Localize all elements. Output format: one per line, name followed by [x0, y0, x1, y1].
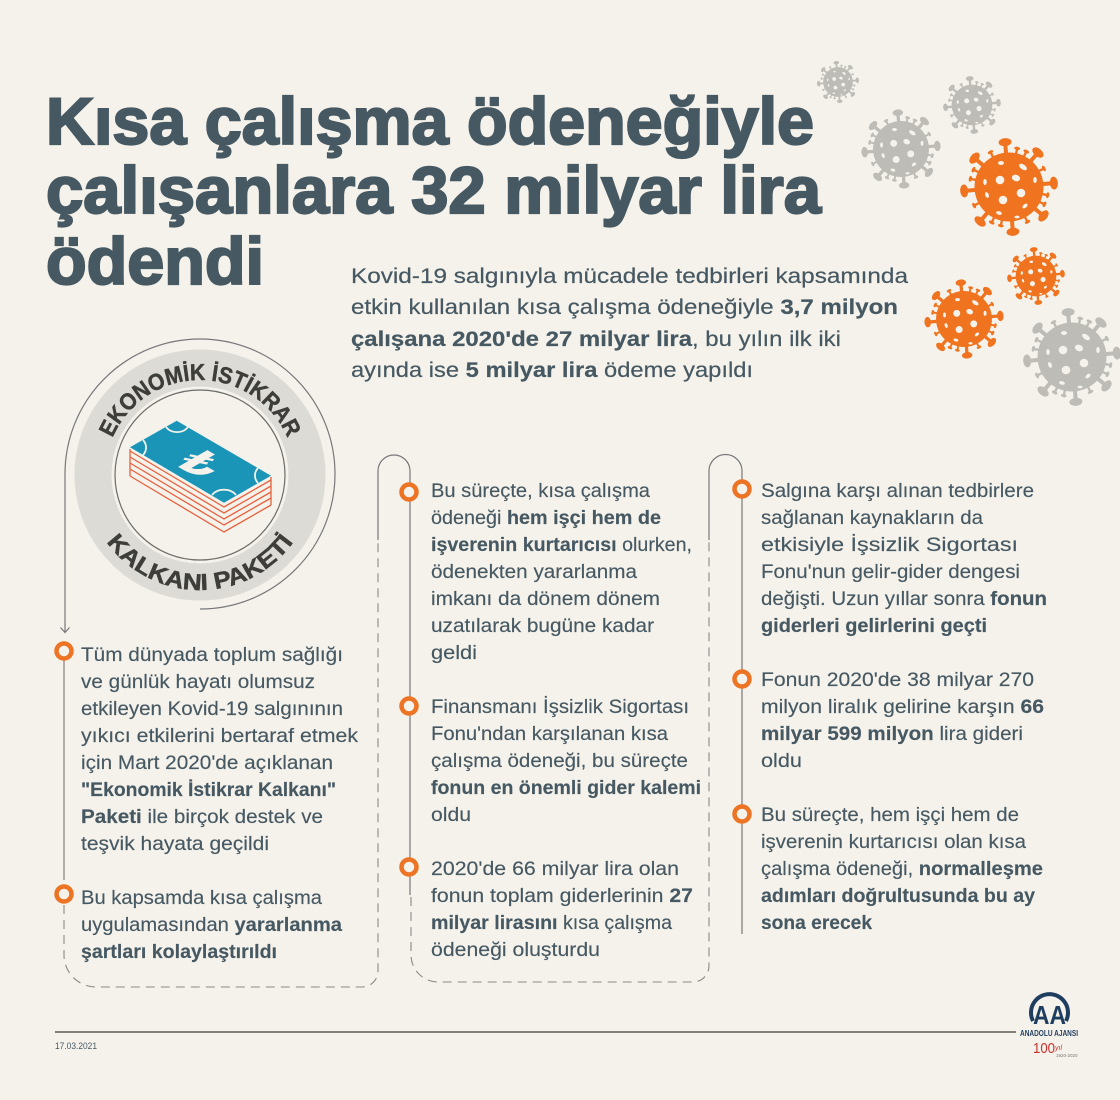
column 1 text: "Ekonomik İstikrar Kalkanı" — [81, 778, 336, 801]
column 1 text: yıkıcı etkilerini bertaraf etmek — [81, 725, 358, 747]
column 3 text: Fonu'nun gelir-gider dengesi — [761, 561, 1020, 583]
column 1 text: uygulamasından yararlanma — [81, 914, 342, 936]
column 2 text: fonun en önemli gider kalemi — [431, 777, 701, 799]
agency name: ANADOLU AJANSI — [1020, 1028, 1078, 1038]
icon: large orange virus — [960, 138, 1058, 236]
column 3 text: milyar 599 milyon lira gideri — [761, 723, 1023, 745]
column 2 text: ödeneği oluşturdu — [431, 939, 600, 961]
column 2 text: fonun toplam giderlerinin 27 — [431, 885, 693, 907]
column 1 text: Paketi ile birçok destek ve — [81, 806, 323, 828]
connector: column 1 solid line — [63, 651, 65, 880]
date: 17.03.2021 — [55, 1041, 97, 1051]
connector: dashed link from column 1 to column 2 — [64, 540, 378, 987]
badge: Ekonomik İstikrar Kalkanı Paketi — [74, 350, 326, 600]
column 3 text: sona erecek — [761, 912, 872, 934]
column 2 text: imkanı da dönem dönem — [431, 588, 660, 610]
badge inner circle — [115, 390, 285, 560]
column 2 text: Fonu'ndan karşılanan kısa — [431, 723, 668, 745]
years: 1920-2020 — [1056, 1053, 1078, 1058]
column 1 text: etkileyen Kovid-19 salgınının — [81, 698, 343, 720]
column 1 text — [81, 644, 358, 963]
icon: small grey virus — [817, 61, 859, 103]
column 2 text — [431, 480, 701, 961]
intro text block — [351, 265, 908, 382]
column 3 text: adımları doğrultusunda bu ay — [761, 885, 1035, 907]
column 1 text: Tüm dünyada toplum sağlığı — [81, 644, 343, 666]
icon: small orange virus — [1007, 247, 1065, 305]
ring text top: EKONOMİK İSTİKRAR — [98, 360, 300, 438]
intro text block: etkin kullanılan kısa çalışma ödeneğiyle 3,7 milyon — [351, 296, 898, 319]
ring text bottom: KALKANI PAKETİ — [107, 531, 293, 590]
column 3 text: etkisiyle İşsizlik Sigortası — [761, 533, 1018, 556]
column 3 text: değişti. Uzun yıllar sonra fonun — [761, 588, 1047, 610]
icon: orange virus — [924, 279, 1004, 359]
icon: lira banknote stack — [130, 421, 271, 532]
column 1 text: ve günlük hayatı olumsuz — [81, 671, 315, 693]
intro text block: ayında ise 5 milyar lira ödeme yapıldı — [351, 359, 753, 382]
title — [46, 84, 822, 298]
column 3 text: Bu süreçte, hem işçi hem de — [761, 804, 1019, 826]
title: Kısa çalışma ödeneğiyle — [46, 84, 814, 158]
column 3 text: Fonun 2020'de 38 milyar 270 — [761, 669, 1034, 691]
column 3 text — [761, 480, 1047, 934]
column 2 text: Bu süreçte, kısa çalışma — [431, 480, 650, 502]
icons: virus cluster — [817, 61, 1120, 406]
column 2 text: Finansmanı İşsizlik Sigortası — [431, 695, 689, 718]
logo arch — [1031, 994, 1068, 1021]
connector: dashed link from column 2 to column 3 — [411, 540, 709, 982]
column 2 text: ödeneği hem işçi hem de — [431, 507, 661, 529]
100th year mark: 100 — [1033, 1040, 1055, 1057]
column 1 text: Bu kapsamda kısa çalışma — [81, 887, 322, 909]
connector arrow around badge — [60, 339, 335, 632]
column 3 text: milyon liralık gelirine karşın 66 — [761, 696, 1044, 718]
column 2 text: oldu — [431, 804, 471, 826]
column 1 text: şartları kolaylaştırıldı — [81, 941, 277, 963]
intro text block: Kovid-19 salgınıyla mücadele tedbirleri kapsamında — [351, 265, 908, 288]
logo letters: AA — [1033, 1000, 1066, 1030]
icon: large grey virus — [1023, 308, 1120, 406]
column 3 text: oldu — [761, 750, 802, 772]
column 1 text: için Mart 2020'de açıklanan — [81, 752, 333, 774]
connector: arch column 3 — [709, 455, 742, 934]
badge ring — [93, 368, 307, 582]
connector: arch column 2 — [378, 455, 410, 895]
title: ödendi — [46, 224, 264, 298]
column 1 text: teşvik hayata geçildi — [81, 833, 269, 855]
column 2 text: ödenekten yararlanma — [431, 561, 637, 583]
column 3 text: Salgına karşı alınan tedbirlere — [761, 480, 1034, 502]
icon: medium grey virus — [943, 76, 1001, 134]
column 3 text: işverenin kurtarıcısı olan kısa — [761, 831, 1026, 853]
icon: lira banknote stack: ₺ — [164, 443, 238, 485]
yil label: yıl — [1054, 1045, 1062, 1052]
footer rule — [55, 1031, 1016, 1033]
column 2 text: 2020'de 66 milyar lira olan — [431, 858, 679, 880]
intro text block: çalışana 2020'de 27 milyar lira , bu yılın ilk iki — [351, 328, 841, 351]
column 3 text: çalışma ödeneği, normalleşme — [761, 858, 1043, 880]
logo: Anadolu Ajansı — [1020, 994, 1078, 1058]
column 3 text: sağlanan kaynakların da — [761, 507, 983, 529]
column 2 text: işverenin kurtarıcısı olurken, — [431, 534, 692, 556]
column 2 text: çalışma ödeneği, bu süreçte — [431, 750, 688, 772]
column 2 text: milyar lirasını kısa çalışma — [431, 912, 672, 934]
icon: grey virus — [861, 109, 941, 189]
column 3 text: giderleri gelirlerini geçti — [761, 615, 987, 637]
column 2 text: uzatılarak bugüne kadar — [431, 615, 655, 637]
bullet markers — [56, 482, 750, 902]
title: çalışanlara 32 milyar lira — [46, 153, 822, 227]
column 2 text: geldi — [431, 642, 477, 664]
